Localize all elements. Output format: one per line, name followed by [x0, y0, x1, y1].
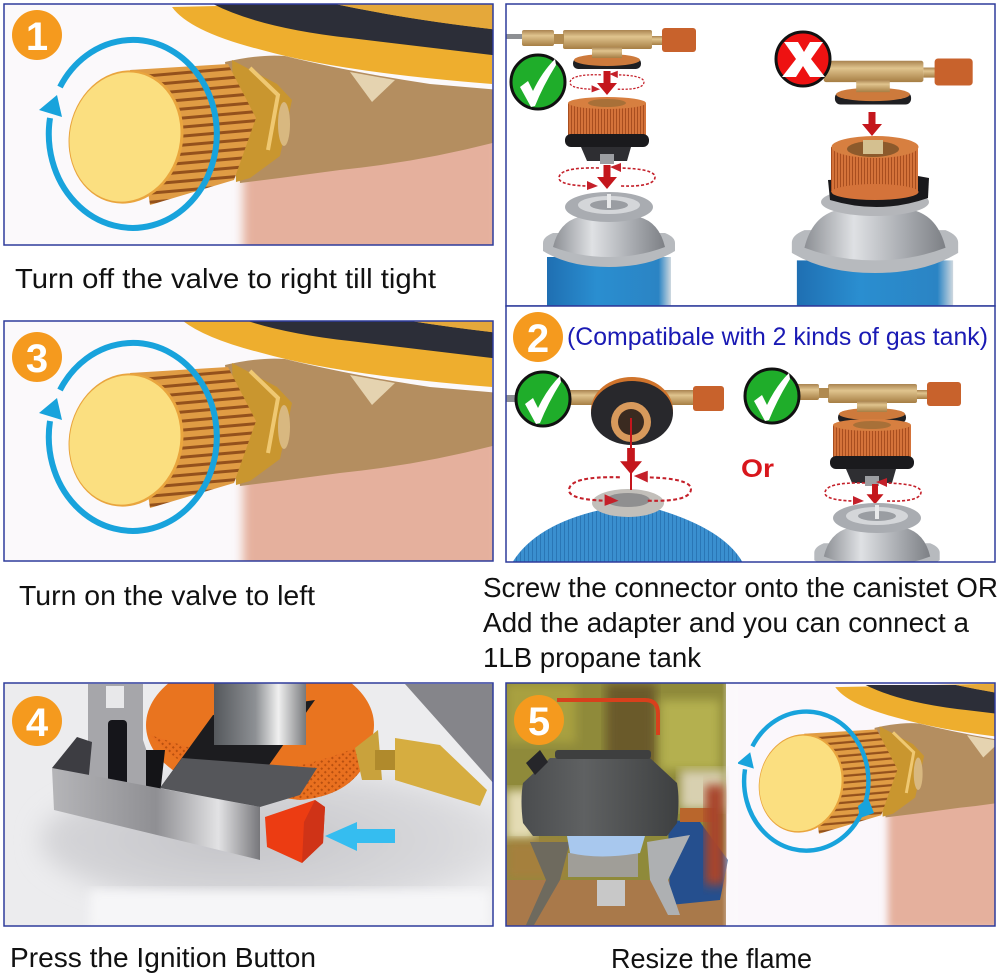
valve knob	[737, 682, 1000, 930]
stove arm top right	[405, 684, 495, 785]
metal bar	[52, 768, 260, 860]
step badge 1: 1	[26, 15, 48, 59]
caption: step 1: Turn off the valve to right till tight	[15, 263, 436, 294]
panel 5: kettle photo and resize flame	[506, 682, 1000, 930]
icon: red X	[776, 32, 830, 86]
panel: correct and wrong connection	[506, 4, 995, 336]
gas canister behind	[668, 820, 728, 905]
caption: step 2: Add the adapter and you can connect a	[483, 607, 969, 638]
step badge 2: 2	[527, 317, 549, 361]
red ignition button	[265, 800, 325, 863]
step badge 2	[513, 312, 563, 362]
caption: step 4: Press the Ignition Button	[10, 942, 316, 973]
caption: step 5: Resize the flame	[611, 943, 812, 974]
step badge 5: 5	[528, 700, 550, 744]
subtitle: (Compatibale with 2 kinds of gas tank)	[567, 323, 988, 351]
stove legs and burner	[526, 835, 690, 925]
valve knob with blue rotation arrow	[39, 4, 492, 244]
threaded rod and mount	[160, 683, 315, 788]
step badge 4: 4	[26, 701, 49, 745]
brass valve pin	[355, 730, 487, 806]
step badge 3	[12, 332, 62, 382]
step badge 1	[12, 10, 62, 60]
panel 3: valve turned on	[3, 320, 494, 562]
blue arrow	[325, 822, 395, 851]
photo: kettle on stove	[506, 683, 728, 926]
left: blue canister connection	[506, 377, 743, 563]
wrong assembly	[792, 58, 973, 306]
valve knob with blue rotation arrow	[39, 322, 492, 560]
caption: step 2: 1LB propane tank	[483, 642, 702, 673]
red kettle handle	[557, 700, 658, 735]
icon: green check	[511, 55, 565, 109]
panel 4: ignition button	[3, 682, 494, 927]
icon: green check right	[745, 369, 799, 423]
panel 1: valve turned off	[3, 3, 494, 246]
panel 2: compatible gas tanks	[505, 305, 996, 563]
blue flame	[567, 836, 645, 856]
step badge 5	[514, 695, 564, 745]
caption: step 3: Turn on the valve to left	[19, 580, 315, 611]
step badge 4	[12, 696, 62, 746]
orange burner disc	[146, 684, 374, 800]
kettle body	[522, 750, 678, 836]
right: adapter on small canister	[798, 382, 961, 562]
upright plate with slots	[88, 684, 165, 795]
Or label: Or	[741, 455, 774, 483]
top right bracket	[160, 758, 317, 807]
correct assembly	[506, 28, 696, 317]
icon: green check left	[516, 372, 570, 426]
step badge 3: 3	[26, 337, 48, 381]
caption: step 2	[483, 572, 998, 673]
caption: step 2: Screw the connector onto the canistet OR	[483, 572, 998, 603]
metal end piece	[52, 737, 92, 775]
